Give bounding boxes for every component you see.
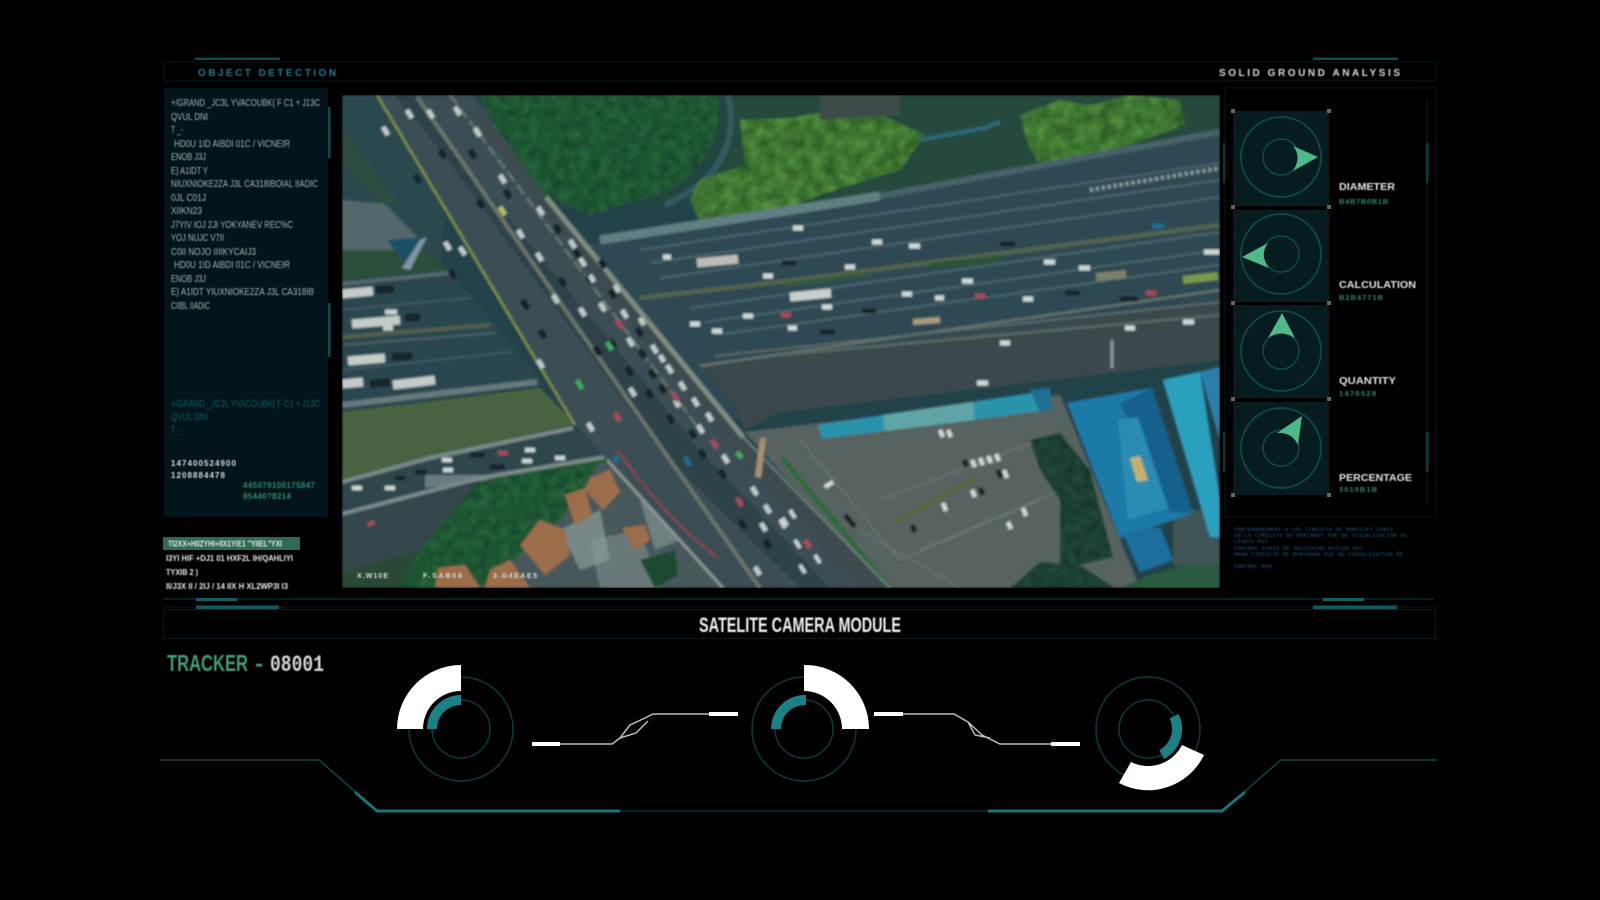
teal code text: T _- <box>171 425 183 436</box>
gauge values <box>1339 197 1389 494</box>
number readouts: 1208884478 <box>171 471 226 480</box>
houses <box>480 462 730 588</box>
diagonal cars coloured <box>577 342 742 458</box>
service road <box>700 302 1220 430</box>
code text block: YOJ NUJC V7II <box>171 233 224 244</box>
tracker label <box>167 650 324 678</box>
code text block: +/GRAND _JC3L YVACOUBK( F C1 + J13C <box>171 98 320 109</box>
photo caption labels: 3.G4EAE5 <box>493 573 537 580</box>
panel: radar gauges <box>1223 88 1436 517</box>
photo caption labels: X.W10E <box>357 573 388 580</box>
heading: object detection: OBJECT DETECTION <box>198 68 336 79</box>
heading: solid ground analysis: SOLID GROUND ANALYSIS <box>1219 68 1400 79</box>
code text block <box>171 98 320 312</box>
tracker label: 08001 <box>270 652 324 678</box>
photo caption labels <box>357 573 537 580</box>
title: SATELITE CAMERA MODULE <box>699 614 901 637</box>
diagonal cars white <box>383 107 787 575</box>
radar 4: percentage <box>1233 402 1329 495</box>
gauge labels: QUANTITY <box>1339 375 1396 387</box>
lower left land <box>400 459 607 588</box>
right small note text: CONTENUERAMENT A LOS CIRCUTIS DE MONTAJET DIRTA <box>1234 526 1394 533</box>
code text block: XIIKN23 <box>171 206 202 217</box>
bright trees <box>690 105 925 222</box>
left road trucks <box>342 291 435 385</box>
connector 2 <box>874 712 1080 746</box>
ring gauge 1 <box>397 665 513 781</box>
car shadows <box>415 150 770 548</box>
left highway <box>342 272 456 400</box>
tracker label: - <box>255 650 263 676</box>
gauge values: B4B7B0B1B <box>1339 197 1389 206</box>
top right land <box>716 96 1220 202</box>
olive field <box>342 388 575 482</box>
bus <box>755 438 766 478</box>
right small note text <box>1234 526 1408 570</box>
code text block: CIIBL IIADIC <box>171 301 210 312</box>
right highway <box>580 130 1220 420</box>
gauge values: 1470528 <box>1339 389 1376 398</box>
number readouts <box>171 459 316 501</box>
right small note text: CONTROL MOD. <box>1234 563 1275 570</box>
road cars horizontal white <box>663 228 1220 383</box>
header bar: frame and titles <box>164 58 1436 81</box>
gauge values: B2B4771B <box>1339 293 1384 302</box>
panel: code readout <box>164 88 330 517</box>
parking cars <box>825 430 1026 529</box>
tracker label: TRACKER <box>167 650 248 676</box>
code text block: ENOB J3J <box>171 274 206 285</box>
ramp cars <box>352 450 565 488</box>
right small note text: CONTROL PANIO DE SWITCHING DATION OUT <box>1234 545 1364 552</box>
code text block: ENOB J3J <box>171 152 206 163</box>
diagonal overpass <box>380 95 859 588</box>
gauge labels <box>1339 181 1416 484</box>
parking lot <box>745 395 1140 588</box>
radar 1: diameter <box>1233 111 1329 206</box>
teal code text <box>171 399 320 436</box>
code text block: T _- <box>171 125 183 136</box>
code text block: E) A1IDT Y <box>171 166 208 177</box>
code text block: HD0U 1ID AIBDI 01C / VICNEIR <box>174 139 290 150</box>
ring gauge 3 <box>1096 677 1204 790</box>
code text block: HD0U 1ID AIBDI 01C / VICNEIR <box>174 260 290 271</box>
blue buildings <box>1067 388 1193 538</box>
connector 1 <box>532 712 738 746</box>
teal code text: QVUL DNI <box>171 412 208 423</box>
code text block: C0II NOJO IIIIKYCAIJ3 <box>171 247 256 258</box>
code text block: J7YIV IOJ 2JI YOKYANEV REC%C <box>171 220 293 231</box>
lower left status text: II/J3X II / 2IJ / 14 IIX H XL2WP3I I3 <box>166 581 288 591</box>
bottom left ramp <box>342 427 605 515</box>
radar 3: quantity <box>1233 305 1329 398</box>
number readouts: 85440?8214 <box>243 492 292 501</box>
radar 2: calculation <box>1233 210 1329 302</box>
right small note text: UR LA CIRCUITO DE MONTANDT FUE DE VISUALIZACION DE <box>1234 532 1408 539</box>
gauge labels: DIAMETER <box>1339 181 1395 193</box>
code text block: QVUL DNI <box>171 112 208 123</box>
lower left status text <box>163 537 300 591</box>
forest top <box>480 95 719 215</box>
right small note text: LIGHTS MIX <box>1234 538 1269 545</box>
gauge labels: PERCENTAGE <box>1339 472 1412 484</box>
number readouts: 445079100175847 <box>243 481 316 490</box>
right small note text: MAUR CIRCUITO DE MONTANDR FUE DE VISUALIZATION DE <box>1234 551 1404 558</box>
code text block: E) A1IDT YIUXNIOKE2ZA J3L CA318IB <box>171 287 314 298</box>
trees beside parking <box>1030 433 1113 570</box>
module title bar <box>163 598 1436 638</box>
code text block: 0JL C01J <box>171 193 206 204</box>
lower left status text: TYXIB 2 ) <box>166 567 198 577</box>
lower left status text: TI2XX+H0ZYHI+IIX1YIE1 "YIIEL"YXI <box>168 538 282 548</box>
code text block: NIUXNIOKE2ZA J3L CA318IBOIAL IIADIC <box>171 179 318 190</box>
photo caption labels: F.SAB06 <box>423 573 462 580</box>
corner marks <box>1231 109 1331 497</box>
left side land <box>342 95 423 198</box>
number readouts: 147400524900 <box>171 459 237 468</box>
lower left status text: I3YI HIF +DJ1 01 HXF2L IH/QAHLIYI <box>166 553 293 563</box>
long blue roof <box>818 392 1050 439</box>
gauge values: 3010B1B <box>1339 485 1378 494</box>
gauge labels: CALCULATION <box>1339 279 1416 291</box>
satellite aerial photo: highway interchange <box>342 95 1220 588</box>
ring gauge 2 <box>752 665 869 781</box>
teal code text: +/GRAND _JC3L YVACOUBK( F C1 + J13C <box>171 399 320 410</box>
bottom frame circuit line <box>160 760 1437 811</box>
